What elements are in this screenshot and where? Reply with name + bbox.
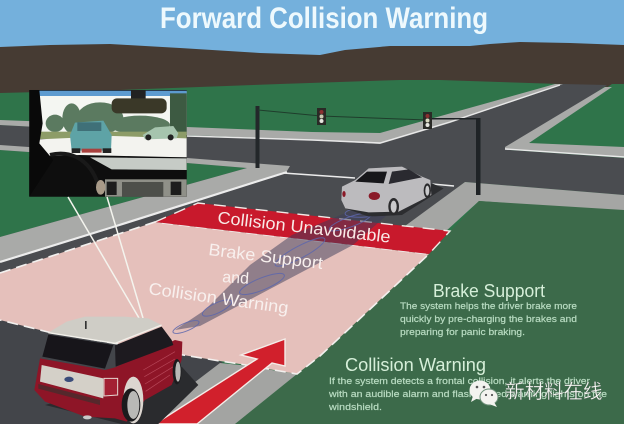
side windows [389,169,422,184]
inset sky [37,91,187,135]
text block: collision warning [328,355,607,413]
exhaust [83,415,92,419]
windshield sill [90,157,187,170]
description: brake support: preparing for panic braking. [400,327,525,338]
in-car camera view inset [29,90,187,197]
rear window [355,172,387,183]
pole [476,118,480,195]
inset teal car [70,121,112,153]
side windows [115,327,173,367]
inset blue sky strip [37,91,187,96]
red arrow [155,339,285,424]
side trim stripes [143,352,175,391]
far left curb [0,84,563,144]
inset trees [46,93,187,134]
tail light right [369,192,380,200]
left lower green [0,150,247,237]
tailgate badge [64,377,74,382]
watermark [470,380,603,407]
rear wheel arch [123,377,143,423]
label: collision unavoidable: Collision Unavoidable [217,208,392,247]
car body [341,167,431,212]
title: Forward Collision Warning [160,2,488,35]
collision unavoidable red band [155,203,450,254]
description: collision warning: with an audible alarm and flashing red warning lights on the [328,389,607,400]
distant hills [0,42,624,100]
front wheel [173,359,181,384]
tail light [104,378,118,396]
traffic signal left [317,108,326,125]
traffic signal right [423,112,432,129]
left traffic pole with wire [256,106,427,168]
arm [428,118,478,120]
icon: chat bubbles [470,380,498,407]
far curb white line [187,85,560,143]
red SUV [34,317,198,424]
roof front edge [48,325,162,343]
skid mark trail [172,205,395,336]
inset side car [143,126,178,140]
skid shadow [175,205,395,330]
left white curb line [0,172,287,262]
inset road [38,136,187,157]
description: brake support [400,301,577,338]
pole [256,106,260,168]
SUV shadow [45,367,198,424]
description: collision warning: windshield. [328,402,382,413]
console [105,179,187,197]
SUV body [34,340,182,422]
lower tailgate bar [38,384,100,405]
right corner curb [405,182,624,232]
right traffic pole with arm [428,118,480,195]
watermark text: 新材料在线 [505,381,603,403]
upper right green corner [529,84,624,147]
rear view mirror [112,90,167,113]
lower right green field [235,201,624,424]
rear wheel [388,198,399,215]
red band white dashed edges [155,203,450,254]
steering wheel [50,154,100,195]
dashboard [29,155,187,197]
tail light left [342,191,346,197]
driver silhouette [29,90,53,197]
left lower curb [0,145,290,262]
stop line right part [432,184,454,186]
near sidewalk [140,363,297,424]
driver hand [96,180,105,195]
warning zone white dashed edges [0,222,429,374]
label: brake support and collision warning: Brake Support [208,240,324,273]
description: brake support: quickly by pre-charging the brakes and [400,314,577,325]
skid loops [172,205,385,336]
antenna [85,321,87,329]
description: collision warning [328,376,607,413]
rear window [42,335,113,369]
SUV roof [48,317,162,343]
upper right curb [505,87,624,157]
silver car ahead [341,167,444,217]
rear wheel [122,388,140,422]
description: collision warning: If the system detects a frontal collision, it alerts the driver [329,376,590,387]
warning zone: brake support and collision warning [0,222,429,374]
label: brake support and collision warning: Collision Warning [147,279,290,318]
text block: brake support [400,281,577,338]
wire [258,110,427,120]
sensor lines from inset to vehicle [68,197,143,318]
stop line [283,173,355,178]
heading: collision warning: Collision Warning [345,355,486,375]
inset frame [29,90,187,197]
inset grass [39,132,187,139]
tailgate panel [40,365,103,398]
upper right white line [505,149,624,157]
label: brake support and collision warning: and [222,269,250,288]
heading: brake support: Brake Support [433,281,545,301]
sky [0,0,624,100]
car shadow [345,183,444,217]
far road [0,84,624,300]
label: brake support and collision warning [147,240,324,318]
front wheel [424,183,431,198]
near road strip [0,318,223,424]
description: brake support: The system helps the driver brake more [400,301,577,312]
